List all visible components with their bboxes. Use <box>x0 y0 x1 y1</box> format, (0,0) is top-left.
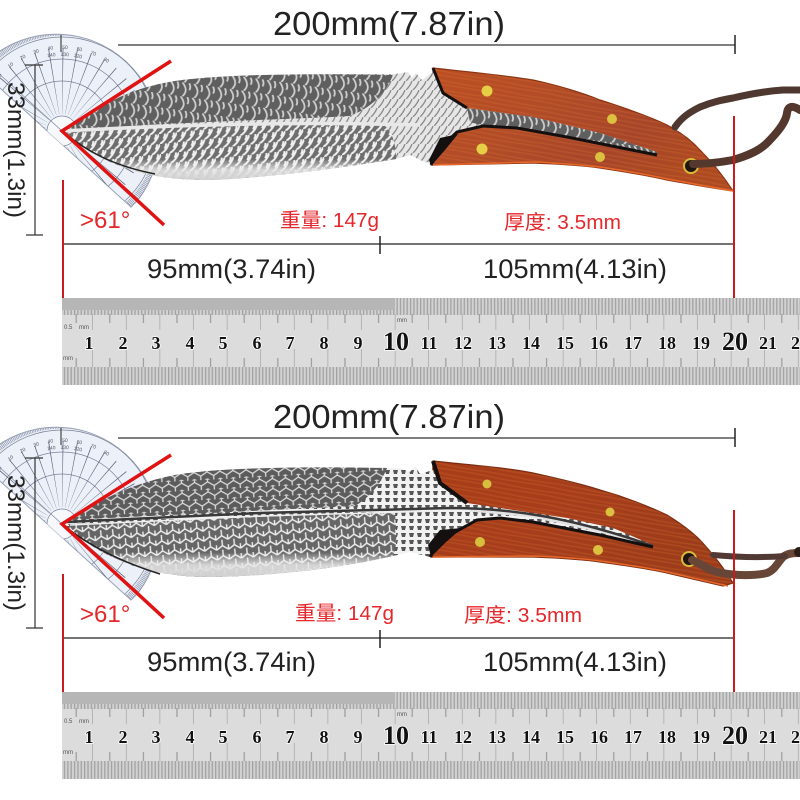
total length dimension: 200mm: 200mm(7.87in) <box>273 5 505 42</box>
angle marker: 61 degrees <box>62 455 171 628</box>
protractor: 50 <box>62 438 68 444</box>
protractor: 20 <box>19 54 27 62</box>
steel ruler: 21 <box>759 333 777 353</box>
steel ruler: mm <box>397 712 407 718</box>
steel ruler: 0.5 <box>64 719 73 725</box>
steel ruler: mm <box>397 318 407 324</box>
protractor: 60 <box>76 46 83 53</box>
angle marker: 61 degrees <box>62 61 171 234</box>
steel ruler: mm <box>63 356 73 362</box>
angle marker: 61 degrees: >61° <box>80 207 130 234</box>
steel ruler <box>62 692 800 779</box>
protractor: 120 <box>73 446 83 454</box>
leather cord <box>692 547 800 575</box>
angle marker: 61 degrees: >61° <box>80 601 130 628</box>
protractor: 130 <box>60 445 69 451</box>
thickness label: 厚度: 3.5mm <box>464 604 582 627</box>
steel ruler: 11 <box>420 727 438 747</box>
steel ruler: 18 <box>658 727 676 747</box>
steel ruler: 11 <box>420 333 438 353</box>
steel ruler: 3 <box>152 333 160 353</box>
steel ruler: mm <box>79 325 89 331</box>
steel ruler: 8 <box>320 333 328 353</box>
blade and handle length dimensions: 105mm(4.13in) <box>483 647 667 677</box>
steel ruler: 20 <box>722 721 748 750</box>
steel ruler: 20 <box>722 327 748 356</box>
steel ruler: 18 <box>658 333 676 353</box>
protractor: 50 <box>62 45 68 51</box>
steel ruler: 19 <box>692 727 710 747</box>
protractor: 120 <box>73 53 83 61</box>
steel ruler: 9 <box>354 727 362 747</box>
protractor: 10 <box>7 454 15 463</box>
steel ruler: 12 <box>454 727 472 747</box>
protractor: 40 <box>47 438 54 445</box>
protractor: 20 <box>19 447 27 455</box>
total length dimension: 200mm: 200mm(7.87in) <box>273 398 505 435</box>
blade width dimension: 33mm: 33mm(1.3in) <box>2 82 29 218</box>
steel ruler: 17 <box>624 727 642 747</box>
steel ruler: 16 <box>590 727 608 747</box>
steel ruler: 5 <box>218 333 228 353</box>
weight label: 重量: 147g <box>295 602 394 625</box>
steel ruler: mm <box>79 719 89 725</box>
steel ruler: 4 <box>186 727 194 747</box>
blade and handle length dimensions: 95mm(3.74in) <box>147 647 316 677</box>
protractor <box>0 426 151 601</box>
steel ruler: 16 <box>590 333 608 353</box>
steel ruler: 6 <box>252 727 262 747</box>
leather cord <box>675 90 800 164</box>
protractor: 70 <box>89 443 97 451</box>
knife blade: scale pattern feather <box>62 461 653 577</box>
steel ruler: mm <box>63 750 73 756</box>
steel ruler: 6 <box>252 333 262 353</box>
blade width dimension: 33mm <box>2 65 43 235</box>
blade and handle length dimensions: 105mm(4.13in) <box>483 254 667 284</box>
steel ruler: 14 <box>522 333 540 353</box>
protractor <box>0 34 152 208</box>
knife handle: rosewood scales with rivets <box>433 68 733 191</box>
weight label: 重量: 147g <box>280 209 379 232</box>
knife handle: rosewood scales with rivets <box>431 461 733 586</box>
steel ruler: 14 <box>522 727 540 747</box>
steel ruler: 12 <box>454 333 472 353</box>
blade width dimension: 33mm <box>2 458 43 628</box>
steel ruler: 17 <box>624 333 642 353</box>
knife blade: feather damascus <box>62 68 657 180</box>
steel ruler: 3 <box>152 727 160 747</box>
blade and handle length dimensions <box>63 116 734 298</box>
steel ruler: 5 <box>218 727 228 747</box>
steel ruler: 21 <box>759 727 777 747</box>
steel ruler: 4 <box>186 333 194 353</box>
protractor: 140 <box>47 445 56 452</box>
steel ruler: 9 <box>354 333 362 353</box>
steel ruler <box>62 298 800 385</box>
steel ruler: 15 <box>556 727 574 747</box>
steel ruler: 13 <box>488 333 506 353</box>
steel ruler: 0.5 <box>64 325 73 331</box>
steel ruler: 13 <box>488 727 506 747</box>
thickness label: 厚度: 3.5mm <box>504 211 621 234</box>
protractor: 130 <box>60 52 69 58</box>
steel ruler: 2 <box>118 333 128 353</box>
steel ruler: 7 <box>286 333 294 353</box>
steel ruler: 15 <box>556 333 574 353</box>
protractor: 80 <box>102 450 110 458</box>
protractor: 60 <box>76 439 83 446</box>
protractor: 30 <box>33 441 40 449</box>
steel ruler: 1 <box>84 727 94 747</box>
steel ruler: 10 <box>383 327 409 356</box>
steel ruler: 19 <box>692 333 710 353</box>
steel ruler: 8 <box>320 727 328 747</box>
steel ruler: 10 <box>383 721 409 750</box>
protractor: 80 <box>102 57 110 65</box>
panel: bottom knife dimensions <box>0 398 800 779</box>
steel ruler: 7 <box>286 727 294 747</box>
blade width dimension: 33mm: 33mm(1.3in) <box>2 475 29 611</box>
blade and handle length dimensions <box>63 510 734 692</box>
steel ruler: 1 <box>84 333 94 353</box>
protractor: 70 <box>89 50 97 58</box>
protractor: 30 <box>33 48 40 56</box>
protractor: 10 <box>7 61 15 70</box>
blade and handle length dimensions: 95mm(3.74in) <box>147 254 316 284</box>
protractor: 40 <box>47 45 54 52</box>
protractor: 140 <box>47 52 56 59</box>
steel ruler: 2 <box>118 727 128 747</box>
panel: top knife dimensions <box>0 5 800 385</box>
